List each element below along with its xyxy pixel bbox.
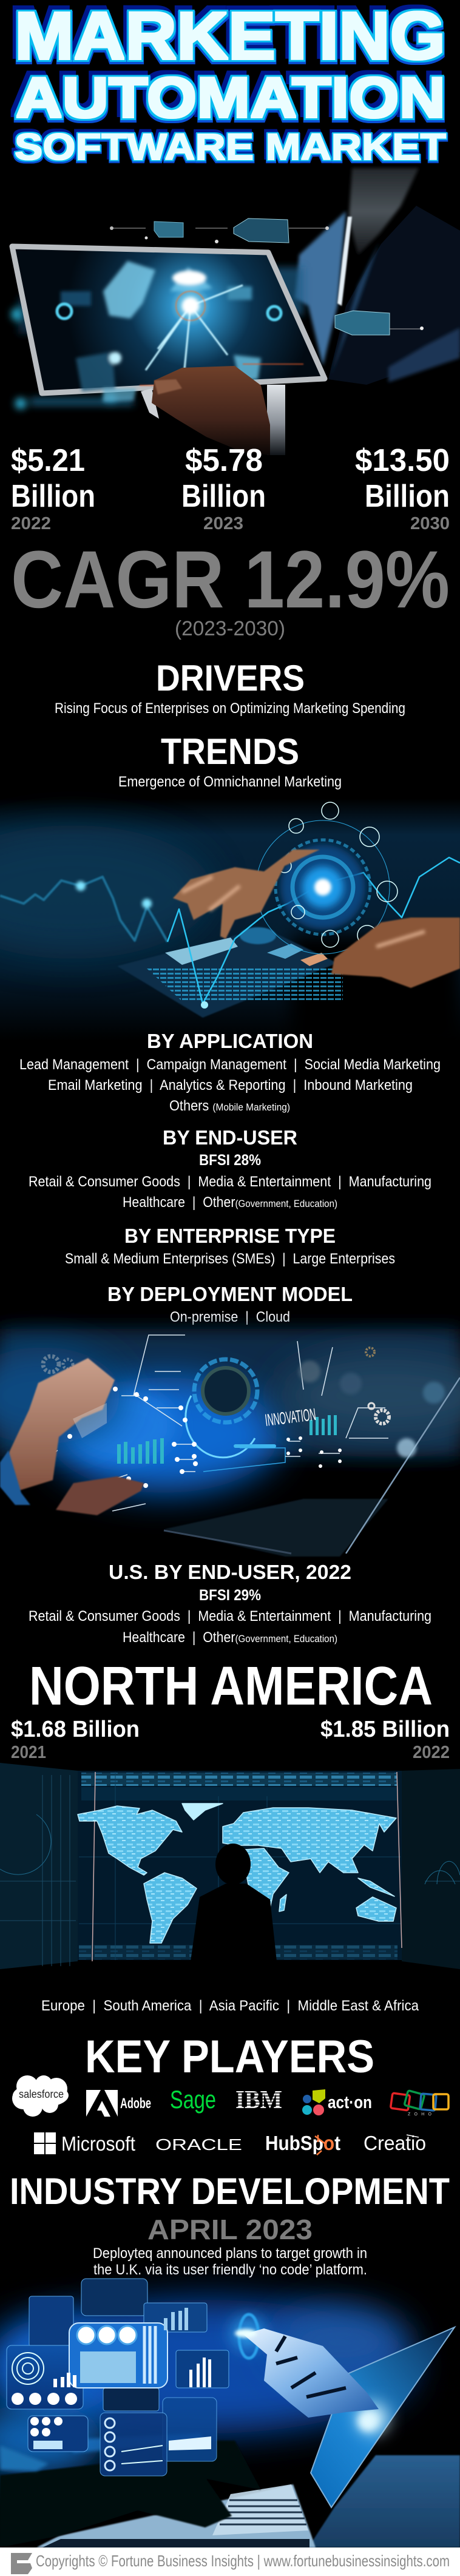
CAGR: (2023-2030) [175,617,285,640]
by deployment model: BY DEPLOYMENT MODEL [107,1283,353,1305]
market size 2023: 2023 [203,514,243,533]
by end-user: BY END-USER [163,1126,297,1149]
market size 2030: 2030 [410,514,450,533]
market size 2022: $5.21 [11,443,85,478]
logo: ZOHO [390,2091,448,2117]
U.S. by end-user: BFSI 29% [199,1587,261,1604]
drivers [55,658,405,717]
title: SOFTWARE MARKET [15,126,446,167]
north america 2022 value: $1.85 Billion [320,1717,450,1742]
drivers: DRIVERS [156,658,305,698]
tablet with charts [117,927,343,1018]
market size 2030 [355,443,450,533]
market size 2023: $5.78 [185,443,263,478]
logo: Adobe [86,2090,151,2117]
logo: act-on [302,2089,372,2115]
logo: Microsoft: Microsoft [61,2132,135,2155]
panel details [12,2308,211,2470]
by enterprise type: BY ENTERPRISE TYPE [124,1225,336,1247]
circuit lines and dots [18,1335,388,1511]
by deployment model: On-premise | Cloud [170,1309,290,1325]
gears [7,1348,389,1482]
by enterprise type: Small & Medium Enterprises (SMEs) | Large Enterprises [65,1251,395,1267]
market size 2022 [11,443,95,533]
typing hands [0,2433,261,2547]
by enterprise type [65,1225,395,1267]
U.S. by end-user: Healthcare | Other(Government, Education) [123,1629,337,1646]
by application: Others (Mobile Marketing) [169,1098,290,1114]
logo: Creatio: Creatio [364,2132,426,2154]
logo: salesforce [12,2075,69,2117]
market size 2023: Billion [181,479,266,514]
market size 2022: 2022 [11,514,51,533]
U.S. by end-user: U.S. BY END-USER, 2022 [109,1561,351,1583]
by end-user [29,1126,431,1211]
glowing points [76,881,208,1009]
logo: Adobe: Adobe [120,2095,151,2112]
logo: HubSpot: HubSpot [265,2132,340,2154]
line chart [0,857,460,1004]
hud circle [186,1359,285,1472]
floating hologram modules [110,218,424,335]
trends: TRENDS [161,731,299,772]
market size 2023 [181,443,266,533]
north america 2022 value: 2022 [413,1743,450,1762]
bokeh lights [299,1361,445,1458]
title: AUTOMATION [16,66,445,129]
industry development: the U.K. via its user friendly ‘no code’ platform. [93,2262,367,2278]
photo: hands on tablet with stock chart [0,799,460,1044]
market size 2030: $13.50 [355,443,450,478]
logo: IBM: IBM [235,2086,282,2114]
north america 2021 value: $1.68 Billion [11,1717,140,1742]
photo: robot hand and laptop with data panels [0,2279,460,2547]
continents [78,1804,396,1943]
HUD circle [256,802,397,954]
hero photo: businessman holding tablet with hologram [12,168,460,455]
man suit and shirt [295,168,460,385]
bar charts [117,1415,337,1464]
hands [173,850,460,988]
hologram glow behind tablet [12,267,303,409]
industry development: Deployteq announced plans to target growth in [93,2245,367,2262]
north america 2021 value: 2021 [11,1743,46,1762]
north america 2021 value [11,1717,140,1762]
drivers: Rising Focus of Enterprises on Optimizing Marketing Spending [55,700,405,717]
north america 2022 value [320,1717,450,1762]
footer [0,2547,460,2576]
hand holding tablet [141,366,285,455]
by application: BY APPLICATION [147,1030,313,1052]
hands [0,1358,144,1515]
footer logo [11,2553,32,2574]
market size 2022: Billion [11,479,95,514]
regions list: Europe | South America | Asia Pacific | Middle East & Africa [41,1998,419,2014]
trends [118,731,342,790]
logo: ZOHO: ZOHO [408,2112,432,2117]
data panels [7,2279,229,2476]
by deployment model [107,1283,353,1325]
market size 2030: Billion [365,479,450,514]
title: MARKETING [15,0,445,73]
logo: act-on: act·on [328,2093,372,2112]
by application [19,1030,441,1114]
photo: innovation interface with laptop [0,1329,460,1557]
industry development: APRIL 2023 [147,2214,313,2245]
table and laptop [36,2327,460,2547]
logo: Microsoft [34,2132,135,2155]
trends: Emergence of Omnichannel Marketing [118,774,342,790]
tablet [12,246,325,402]
logo: Oracle: ORACLE [155,2135,242,2154]
robot hand [232,2314,379,2418]
by end-user: Healthcare | Other(Government, Education) [123,1194,337,1211]
logo: salesforce: salesforce [19,2088,64,2100]
U.S. by end-user [29,1561,431,1646]
laptop [164,1378,460,1557]
by application: Email Marketing | Analytics & Reporting | Inbound Marketing [48,1077,413,1094]
title [15,0,446,167]
industry development [10,2171,450,2278]
by end-user: BFSI 28% [199,1152,261,1169]
innovation label: INNOVATION [264,1405,317,1430]
key players heading: KEY PLAYERS [85,2031,374,2083]
photo: world map screen with silhouette [0,1763,460,1969]
logo: Sage: Sage [170,2085,216,2114]
silhouette [191,1844,277,1961]
